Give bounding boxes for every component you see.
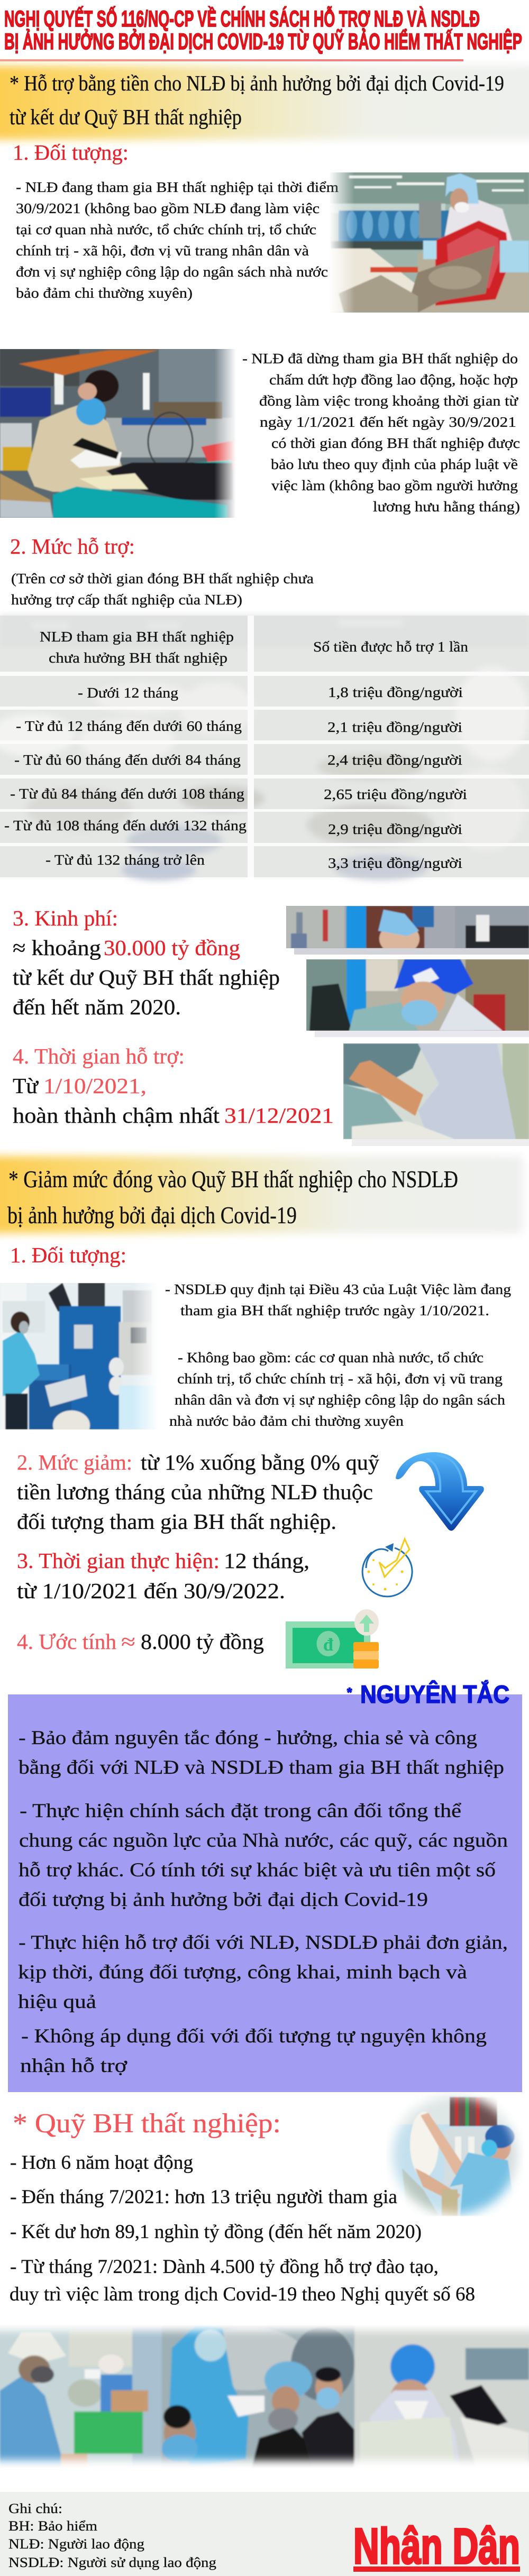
text block: 4. Thời gian hỗ trợ: 4. Thời gian hỗ trợ: [13,1044,185,1068]
text block: workers who stopped participating: bảo lưu theo quy định của pháp luật về [271,456,518,472]
principle 2: hỗ trợ khác. Có tính tới sự khác biệt và ưu tiên một số [19,1859,496,1881]
text block: employers eligible: - Không bao gồm: các cơ quan nhà nước, tổ chức [178,1350,484,1365]
photo: worker inspecting component [0,349,236,518]
text block: workers who stopped participating: lương hưu hằng tháng) [373,499,520,515]
principle 2: - Thực hiện chính sách đặt trong cân đối tổng thể [20,1800,462,1822]
text block: 4. Thời gian hỗ trợ: 1/10/2021, [43,1074,147,1098]
table rows: 1,8 triệu đồng/người [328,684,463,700]
icon: money with coins: đ [323,1635,333,1655]
text block: unemployment fund: - Từ tháng 7/2021: Dành 4.500 tỷ đồng hỗ trợ đào tạo, [10,2256,439,2278]
text block: 3. Kinh phí: từ kết dư Quỹ BH thất nghiệp [13,965,280,989]
text block: workers who stopped participating: đồng làm việc trong khoảng thời gian từ [259,393,519,409]
text block: employers eligible: nhân dân và đơn vị sự nghiệp công lập do ngân sách [175,1392,506,1408]
table header: chưa hưởng BH thất nghiệp [49,650,227,666]
heading: reduced contribution: bị ảnh hưởng bởi đại dịch Covid-19 [7,1202,297,1229]
panel: footnote [0,2492,529,2576]
table rows: - Từ đủ 12 tháng đến dưới 60 tháng [16,718,242,734]
text block: workers who stopped participating [242,351,520,515]
text block: 3. Kinh phí: 30.000 tỷ đồng [104,936,240,960]
text block: employers eligible: nhà nước bảo đảm chi thường xuyên [169,1413,404,1429]
principle 4: nhận hỗ trợ [20,2055,127,2077]
table header: Số tiền được hỗ trợ 1 lần [313,639,469,655]
text block: current participants: đơn vị sự nghiệp công lập do ngân sách nhà nước [16,264,328,280]
text block: 4. Ước tính: 4. Ước tính [17,1629,116,1654]
table rows [4,684,467,871]
text block: 4. Thời gian hỗ trợ [13,1044,334,1127]
text block: 2. Mức giảm [17,1450,380,1534]
text block: unemployment fund: - Hơn 6 năm hoạt động [10,2152,193,2174]
text block: 4. Ước tính [17,1629,264,1654]
text block: abbreviations: Ghi chú: [8,2501,62,2516]
text block: 3. Kinh phí: đến hết năm 2020. [13,995,181,1019]
heading: 2. Mức hỗ trợ: 2. Mức hỗ trợ: [10,534,135,558]
principle 3: - Thực hiện hỗ trợ đối với NLĐ, NSDLĐ phải đơn giản, [19,1932,508,1954]
table: support levels [0,616,529,881]
text block: 3. Thời gian thực hiện: 3. Thời gian thực hiện: [17,1548,220,1573]
icon: money with coins [286,1609,379,1669]
heading: Nguyên tắc: * [347,1685,352,1700]
text block: current participants: chính trị - xã hội, đơn vị vũ trang nhân dân và [16,243,309,259]
principle 1: - Bảo đảm nguyên tắc đóng - hưởng, chia sẻ và công [19,1727,477,1749]
text block: 4. Thời gian hỗ trợ: Từ [13,1074,39,1098]
text block: 3. Thời gian thực hiện [17,1548,309,1603]
text block: 3. Kinh phí: 3. Kinh phí: [13,906,118,930]
heading: support for workers [10,71,504,129]
heading: reduced contribution [7,1166,458,1229]
text block: employers eligible: - NSDLĐ quy định tại Điều 43 của Luật Việc làm đang [165,1281,511,1297]
text block: basis note [11,571,314,608]
text block: unemployment fund: - Kết dư hơn 89,1 nghìn tỷ đồng (đến hết năm 2020) [10,2221,422,2243]
text block: employers eligible [165,1281,511,1429]
text block: unemployment fund: duy trì việc làm trong dịch Covid-19 theo Nghị quyết số 68 [10,2284,475,2305]
table rows: - Từ đủ 132 tháng trở lên [45,852,205,868]
table rows: - Dưới 12 tháng [78,685,178,701]
icon: blue down arrow [396,1452,484,1530]
text block: current participants: 30/9/2021 (không bao gồm NLĐ đang làm việc [16,200,320,216]
principle 2: đối tượng bị ảnh hưởng bởi đại dịch Covid-19 [19,1889,428,1911]
heading: Nguyên tắc: NGUYÊN TẮC [360,1680,509,1708]
panel: section 2 heading band [0,1156,523,1233]
photo: textile worker [386,2093,524,2216]
text block: abbreviations [8,2501,216,2570]
text block: current participants: bảo đảm chi thường xuyên) [16,285,193,301]
text block: current participants: tại cơ quan nhà nước, tổ chức chính trị, tổ chức [16,222,316,237]
text block: abbreviations: NSDLĐ: Người sử dụng lao động [8,2555,216,2570]
principle 3: kịp thời, đúng đối tượng, công khai, minh bạch và [18,1961,467,1983]
text block: abbreviations: BH: Bảo hiểm [8,2518,97,2534]
text block: 3. Thời gian thực hiện: từ 1/10/2021 đến 30/9/2022. [17,1579,285,1603]
table rows: 2,9 triệu đồng/người [328,821,462,837]
table rows: 3,3 triệu đồng/người [328,855,462,871]
table rows: - Từ đủ 84 tháng đến dưới 108 tháng [10,786,244,802]
principle 4: - Không áp dụng đối với đối tượng tự nguyện không [21,2025,487,2047]
principle 3: hiệu quả [18,1991,96,2013]
text block: 3. Kinh phí: ≈ khoảng [13,936,101,960]
panel: section 1 heading band [0,66,529,140]
heading: support for workers: từ kết dư Quỹ BH thất nghiệp [10,105,242,129]
principle 1: bằng đối với NLĐ và NSDLĐ tham gia BH thất nghiệp [19,1757,504,1779]
table rows: 2,65 triệu đồng/người [324,786,467,802]
principle 2 [19,1800,508,1911]
text block: 3. Thời gian thực hiện: 12 tháng, [224,1548,309,1573]
table header [40,629,469,666]
text block: 2. Mức giảm: từ 1% xuống bằng 0% quỹ [141,1450,380,1474]
text block: unemployment fund: - Đến tháng 7/2021: hơn 13 triệu người tham gia [10,2186,397,2208]
text block: 4. Ước tính: 8.000 tỷ đồng [141,1629,264,1654]
text block: unemployment fund [10,2109,475,2305]
text block: 4. Ước tính: ≈ [121,1629,135,1654]
text block: 2. Mức giảm: đối tượng tham gia BH thất nghiệp. [17,1509,336,1534]
text block: 2. Mức giảm: tiền lương tháng của những NLĐ thuộc [17,1480,373,1504]
text block: 3. Kinh phí [13,906,280,1019]
principle 3 [18,1932,508,2013]
panel: principles [8,1694,522,2092]
heading: 1. Đối tượng (employers): 1. Đối tượng: [10,1243,126,1267]
title [4,6,522,54]
table rows: 2,1 triệu đồng/người [327,719,462,735]
principle 4 [20,2025,487,2077]
text block: basis note: hưởng trợ cấp thất nghiệp của NLĐ) [11,592,242,608]
text block: workers who stopped participating: chấm dứt hợp đồng lao động, hoặc hợp [269,372,518,388]
photo strip: workers and covid testing [0,2325,529,2468]
icon: clock with check [362,1539,412,1597]
photo: garment worker sliced strips [286,906,529,1146]
principle 1 [19,1727,504,1779]
photo: machine operator [0,1283,159,1440]
table rows: - Từ đủ 108 tháng đến dưới 132 tháng [4,818,247,833]
table header: NLĐ tham gia BH thất nghiệp [40,629,234,645]
text block: employers eligible: chính trị, tổ chức chính trị - xã hội, đơn vị vũ trang [177,1371,503,1387]
text block: abbreviations: NLĐ: Người lao động [8,2536,144,2552]
text block: workers who stopped participating: ngày 1/1/2021 đến hết ngày 30/9/2021 [260,414,516,430]
text block: 4. Thời gian hỗ trợ: hoàn thành chậm nhất [13,1103,220,1127]
text block: current participants [16,179,339,301]
text block: employers eligible: tham gia BH thất nghiệp trước ngày 1/10/2021. [180,1303,489,1318]
photo: shrimp processing worker [329,172,529,313]
text block: current participants: - NLĐ đang tham gia BH thất nghiệp tại thời điểm [16,179,339,195]
text block: workers who stopped participating: có thời gian đóng BH thất nghiệp được [271,435,520,451]
table rows: 2,4 triệu đồng/người [327,752,462,768]
text block: 4. Thời gian hỗ trợ: 31/12/2021 [224,1103,334,1127]
text block: workers who stopped participating: việc làm (không bao gồm người hưởng [271,478,518,493]
heading: Quỹ BH thất nghiệp: * Quỹ BH thất nghiệp: [13,2109,281,2139]
text block: 2. Mức giảm: 2. Mức giảm: [17,1450,132,1474]
principle 2: chung các nguồn lực của Nhà nước, các quỹ, các nguồn [19,1830,508,1851]
heading: 1. Đối tượng: 1. Đối tượng: [13,140,129,164]
text block: basis note: (Trên cơ sở thời gian đóng BH thất nghiệp chưa [11,571,314,586]
text block: workers who stopped participating: - NLĐ đã dừng tham gia BH thất nghiệp do [242,351,518,366]
table rows: - Từ đủ 60 tháng đến dưới 84 tháng [14,752,241,768]
